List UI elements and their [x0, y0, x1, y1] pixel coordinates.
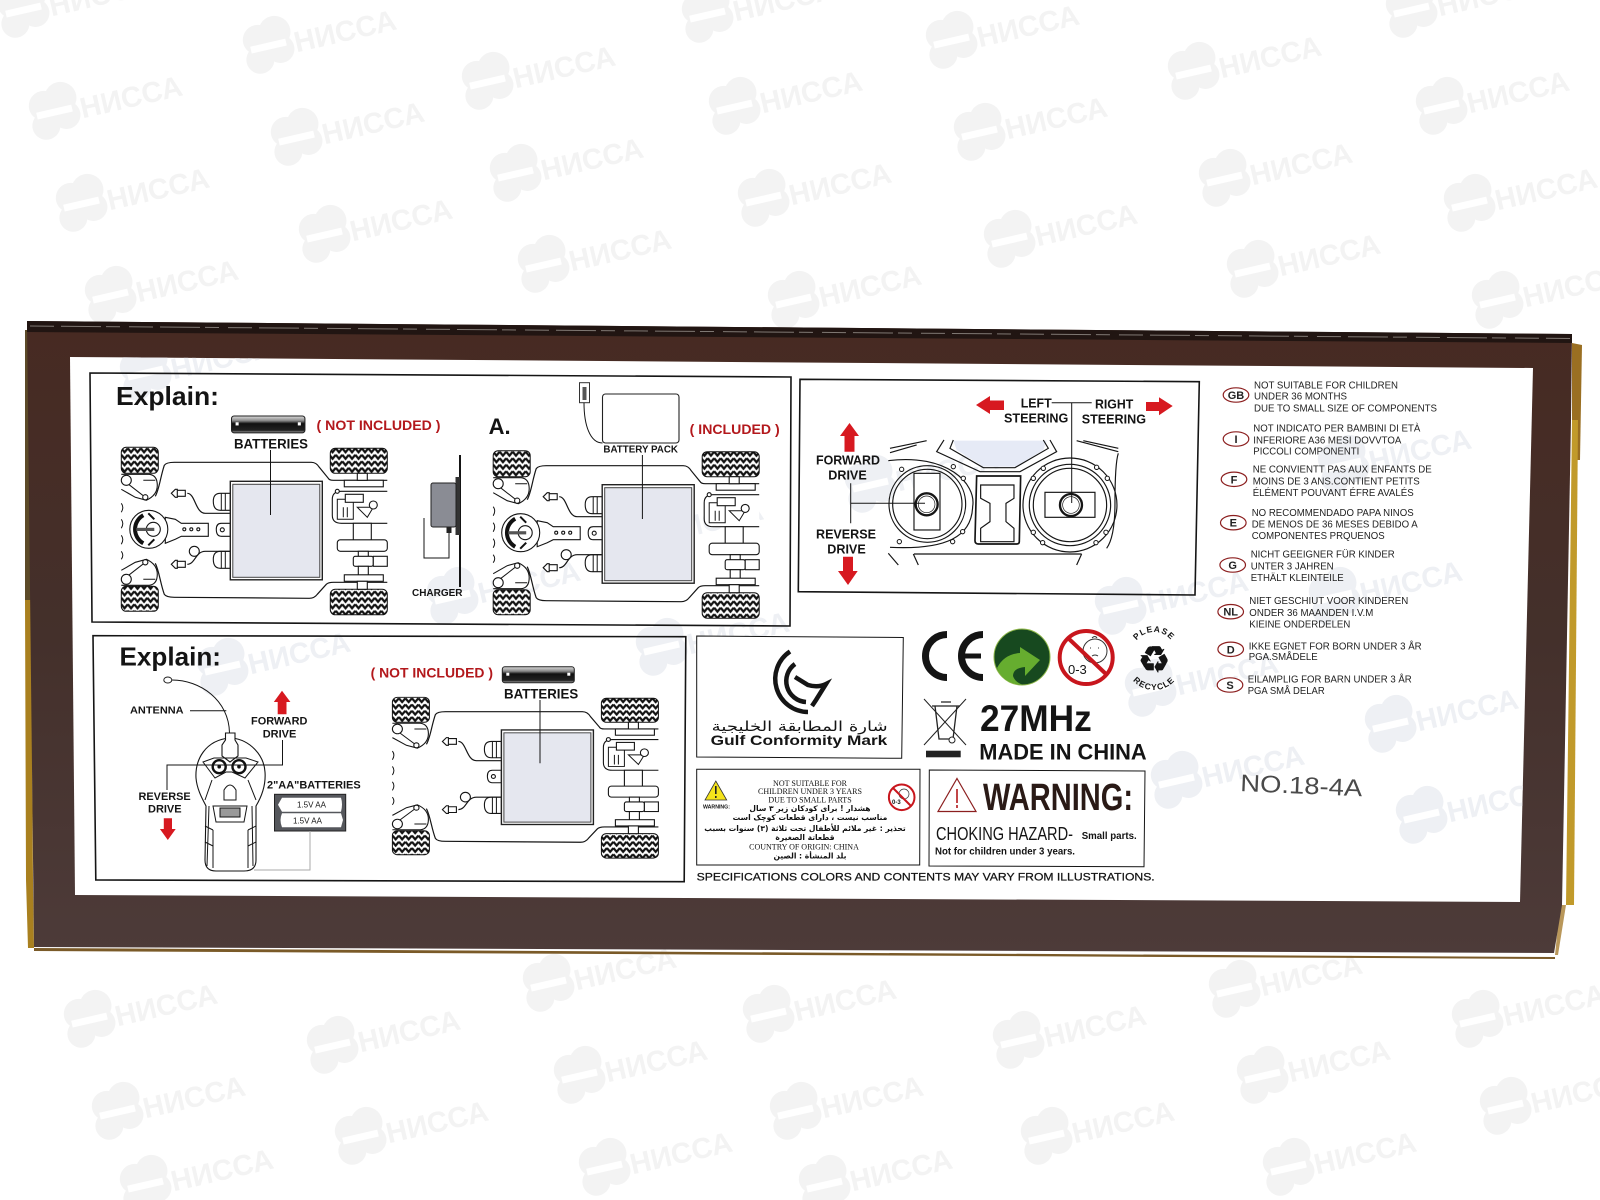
- warning text lines: بلد المنشأة : الصين: [774, 850, 847, 860]
- language: GB: UNDER 36 MONTHS: [1254, 391, 1347, 402]
- text: arabic name: شارة المطابقة الخليجية: [712, 719, 888, 735]
- icon: green dot: [994, 629, 1050, 685]
- panel: multi-language warning: [697, 769, 920, 865]
- label: not included: ( NOT INCLUDED ): [316, 417, 440, 433]
- icon: small age warning: [889, 784, 914, 810]
- warning text lines: CHILDREN UNDER 3 YEARS: [758, 787, 862, 796]
- heading: Explain: Explain:: [120, 642, 221, 672]
- language: I: INFERIORE A36 MESI DOVVTOA: [1253, 435, 1402, 446]
- icon: warning triangle: [705, 781, 727, 800]
- labels: drive: DRIVE: [828, 468, 867, 482]
- language: F: ÉLÉMENT POUVANT ÉFRE AVALÉS: [1253, 486, 1414, 499]
- language: E: NO RECOMMENDADO PAPA NINOS: [1252, 508, 1414, 519]
- label: reverse drive: REVERSE: [138, 791, 191, 803]
- background watermarks: НИССА: [538, 133, 647, 187]
- language: G: UNTER 3 JAHREN: [1251, 561, 1334, 572]
- background watermarks: НИССА: [355, 1005, 464, 1059]
- background watermarks: НИССА: [291, 5, 400, 59]
- labels: drive: [816, 453, 880, 556]
- language: F: [1221, 465, 1432, 499]
- icon: red warning triangle: [938, 778, 976, 812]
- background watermarks: НИССА: [816, 260, 925, 314]
- white label: [70, 357, 1533, 902]
- label watermarks: НИССА: [1444, 775, 1553, 829]
- icon: battery: [502, 667, 574, 683]
- arrow: forward: [274, 691, 290, 714]
- background watermarks: НИССА: [1069, 1096, 1178, 1150]
- arrow: forward: [840, 423, 859, 452]
- warning text lines: قطعاتة الصغيرة: [775, 833, 835, 842]
- arrow: right: [1146, 397, 1173, 415]
- icon: not for ages 0-3: [1060, 631, 1113, 684]
- warning text lines: مناسب نیست ، دارای قطعات کوچک است: [733, 813, 888, 822]
- background watermarks: НИССА: [140, 1071, 249, 1125]
- label: option A: A.: [489, 414, 511, 439]
- box top edge: [27, 321, 1572, 343]
- label: batteries: BATTERIES: [234, 436, 308, 451]
- language: NL: NIET GESCHIUT VOOR KINDEREN: [1249, 596, 1408, 607]
- language: E: DE MENOS DE 36 MESES DEBIDO A: [1252, 520, 1418, 531]
- icon: battery holder: 1.5V AA: [293, 816, 323, 826]
- labels: steering: RIGHT: [1095, 396, 1133, 411]
- panel: remote control: [93, 636, 686, 882]
- labels: steering: STEERING: [1082, 411, 1146, 426]
- warning text lines: تحذير : غير ملائم للأطفال تحت ثلاثة (٣) سنوات بسبب: [704, 823, 906, 833]
- background watermarks: НИССА: [1257, 949, 1366, 1003]
- text: warning small: WARNING:: [703, 804, 730, 810]
- background watermarks: НИССА: [347, 194, 456, 248]
- text: frequency: 27MHz: [980, 698, 1092, 739]
- chassis diagram 2: [493, 451, 759, 618]
- label: reverse drive: [138, 791, 191, 816]
- warning text lines: [704, 779, 906, 860]
- icon: CE mark: [926, 634, 983, 678]
- icon: charger: [424, 455, 460, 587]
- background watermarks: НИССА: [571, 943, 680, 997]
- background watermarks: НИССА: [383, 1096, 492, 1150]
- language: GB: GB: [1228, 390, 1244, 402]
- background watermarks: НИССА: [1247, 138, 1356, 192]
- label watermarks: НИССА: [475, 556, 584, 610]
- label: forward drive: [251, 715, 307, 740]
- background watermarks: НИССА: [786, 158, 895, 212]
- labels: steering: STEERING: [1004, 410, 1068, 425]
- leader lines: [851, 403, 1092, 523]
- heading: warning: WARNING:: [983, 777, 1133, 819]
- icon: please recycle: RECYCLE: [1133, 676, 1174, 690]
- background watermarks: НИССА: [104, 163, 213, 217]
- arrow: reverse: [838, 557, 858, 585]
- label watermarks: НИССА: [1199, 740, 1308, 794]
- language: G: G: [1228, 560, 1237, 572]
- language: G: NICHT GEEIGNER FÜR KINDER: [1251, 549, 1395, 561]
- language: NL: NL: [1223, 607, 1238, 619]
- background watermarks: НИССА: [974, 0, 1083, 54]
- text: specifications disclaimer: SPECIFICATIONS COLORS AND CONTENTS MAY VARY FROM ILLUSTRATIONS.: [697, 872, 1155, 884]
- background watermarks: НИССА: [1285, 1035, 1394, 1089]
- icon: please recycle: ♻: [1138, 640, 1170, 681]
- icon: please recycle: [1132, 626, 1174, 690]
- box edges: gold flaps: [25, 330, 1582, 959]
- language: D: PGA.SMÅDELE: [1249, 650, 1318, 663]
- language: S: S: [1226, 680, 1234, 692]
- label watermarks: НИССА: [658, 495, 767, 549]
- background watermarks: НИССА: [757, 66, 866, 120]
- leader: stick directions: [167, 740, 282, 790]
- background watermarks: НИССА: [510, 41, 619, 95]
- label: charger: CHARGER: [412, 587, 463, 599]
- labels: steering: [1004, 395, 1146, 426]
- background watermarks: НИССА: [1275, 229, 1384, 283]
- label: battery pack: BATTERY PACK: [603, 445, 679, 456]
- antenna: [164, 677, 230, 733]
- panel: gulf conformity mark: [697, 636, 903, 758]
- icon: not for ages 0-3: 0-3: [1068, 662, 1087, 677]
- text: choking hazard: CHOKING HAZARD-: [936, 824, 1073, 844]
- icon: battery holder: 1.5V AA: [297, 801, 327, 810]
- background watermarks: НИССА: [627, 1127, 736, 1181]
- warning text lines: COUNTRY OF ORIGIN: CHINA: [749, 842, 859, 851]
- icon: WEEE crossed bin: [924, 699, 966, 757]
- leader: antenna: [190, 710, 226, 712]
- language: E: COMPONENTES PRQUENOS: [1252, 531, 1385, 542]
- label watermarks: [115, 316, 1554, 847]
- language: GB: [1223, 380, 1437, 415]
- icon: battery pack: [580, 383, 679, 443]
- leader line: [270, 450, 272, 515]
- panel: controller steering: [798, 379, 1199, 595]
- background watermarks: НИССА: [791, 974, 900, 1028]
- panel: choking hazard warning: [929, 770, 1145, 867]
- language: NL: [1218, 596, 1408, 630]
- text: small parts: Small parts.: [1082, 831, 1137, 842]
- language: D: IKKE EGNET FOR BORN UNDER 3 ÅR: [1249, 639, 1422, 652]
- icon: battery holder: [274, 794, 346, 831]
- label: included: ( INCLUDED ): [690, 421, 780, 437]
- arrow: reverse: [160, 818, 176, 840]
- background watermarks: НИССА: [168, 1144, 277, 1198]
- controller drawing: [888, 440, 1118, 565]
- language: E: [1220, 508, 1418, 542]
- warning text lines: هشدار ! برای کودکان زیر ۳ سال: [749, 804, 871, 813]
- multilingual warnings list: [1217, 380, 1437, 697]
- label: not included: ( NOT INCLUDED ): [371, 664, 493, 680]
- background watermarks: НИССА: [1464, 66, 1573, 120]
- background watermarks: НИССА: [1492, 163, 1600, 217]
- label: reverse drive: DRIVE: [148, 804, 182, 816]
- background watermarks: НИССА: [77, 71, 186, 125]
- language: NL: ONDER 36 MAANDEN I.V.M: [1249, 608, 1373, 619]
- icon: please recycle: PLEASE: [1132, 626, 1174, 640]
- label: forward drive: FORWARD: [251, 715, 307, 727]
- warning text lines: NOT SUITABLE FOR: [773, 779, 848, 788]
- label: batteries: BATTERIES: [504, 685, 578, 701]
- label watermarks: НИССА: [893, 444, 1002, 498]
- labels: drive: DRIVE: [827, 542, 866, 556]
- language: NL: KIEINE ONDERDELEN: [1249, 619, 1350, 630]
- label: forward drive: DRIVE: [263, 728, 296, 740]
- language: GB: DUE TO SMALL SIZE OF COMPONENTS: [1254, 404, 1437, 415]
- heading: Explain: Explain:: [116, 381, 219, 411]
- remote control drawing: [196, 733, 265, 871]
- language: I: NOT INDICATO PER BAMBINI DI ETÀ: [1253, 422, 1421, 435]
- icon: battery: [232, 416, 305, 433]
- leader: holder to remote: [254, 831, 310, 870]
- language: F: F: [1231, 474, 1238, 486]
- text: model number: NO.18-4A: [1240, 770, 1363, 802]
- brown box panel: [27, 321, 1572, 953]
- label watermarks: НИССА: [1357, 556, 1466, 610]
- chassis diagram 3: [392, 697, 658, 858]
- icon: small age warning: 0-3: [892, 800, 901, 806]
- background watermarks: НИССА: [1032, 199, 1141, 253]
- language: I: PICCOLI COMPONENTI: [1253, 446, 1359, 457]
- background watermarks: НИССА: [1002, 92, 1111, 146]
- language: F: NE CONVIENTT PAS AUX ENFANTS DE: [1253, 465, 1432, 476]
- background watermarks: НИССА: [818, 1071, 927, 1125]
- icon: G mark: [775, 652, 826, 712]
- panel: battery installation: [90, 373, 791, 626]
- background watermarks: НИССА: [602, 1035, 711, 1089]
- leader line: [539, 700, 541, 763]
- background watermarks: НИССА: [1216, 31, 1325, 85]
- label: antenna: ANTENNA: [130, 704, 184, 716]
- background watermarks: НИССА: [319, 97, 428, 151]
- background watermarks: НИССА: [1041, 1000, 1150, 1054]
- labels: drive: FORWARD: [816, 453, 880, 467]
- warning text lines: DUE TO SMALL PARTS: [768, 795, 852, 804]
- labels: steering: LEFT: [1021, 395, 1052, 410]
- language: S: PGA SMÅ DELAR: [1248, 684, 1325, 697]
- arrow: left: [976, 396, 1004, 414]
- language: D: [1218, 639, 1422, 663]
- background watermarks: НИССА: [1311, 1127, 1420, 1181]
- label watermarks: НИССА: [1173, 648, 1282, 702]
- label watermarks: НИССА: [168, 332, 277, 386]
- text: age limit: Not for children under 3 years.: [935, 846, 1075, 857]
- language: I: [1223, 422, 1421, 457]
- language: S: [1217, 672, 1412, 697]
- background watermarks: НИССА: [112, 979, 221, 1033]
- label watermarks: НИССА: [684, 607, 793, 661]
- label: AA batteries: 2"AA"BATTERIES: [267, 779, 361, 791]
- language: D: D: [1227, 644, 1235, 656]
- background watermarks: НИССА: [133, 255, 242, 309]
- labels: drive: REVERSE: [816, 527, 876, 541]
- language: S: EILAMPLIG FOR BARN UNDER 3 ÅR: [1248, 672, 1412, 685]
- background watermarks: НИССА: [566, 224, 675, 278]
- language: G: ETHÄLT KLEINTEILE: [1251, 572, 1344, 584]
- leader line: [641, 455, 643, 519]
- label watermarks: НИССА: [1413, 684, 1522, 738]
- label watermarks: НИССА: [245, 627, 354, 681]
- language: F: MOINS DE 3 ANS.CONTIENT PETITS: [1253, 476, 1420, 487]
- text: gulf conformity mark: Gulf Conformity Mark: [711, 733, 888, 748]
- text: made in china: MADE IN CHINA: [979, 739, 1147, 764]
- label watermarks: НИССА: [1143, 566, 1252, 620]
- language: E: E: [1230, 518, 1237, 530]
- language: GB: NOT SUITABLE FOR CHILDREN: [1254, 380, 1398, 391]
- language: I: I: [1234, 434, 1238, 446]
- background watermarks: НИССА: [847, 1144, 956, 1198]
- label watermarks: НИССА: [1366, 424, 1475, 478]
- language: G: [1220, 549, 1395, 584]
- chassis diagram 1: [121, 447, 387, 615]
